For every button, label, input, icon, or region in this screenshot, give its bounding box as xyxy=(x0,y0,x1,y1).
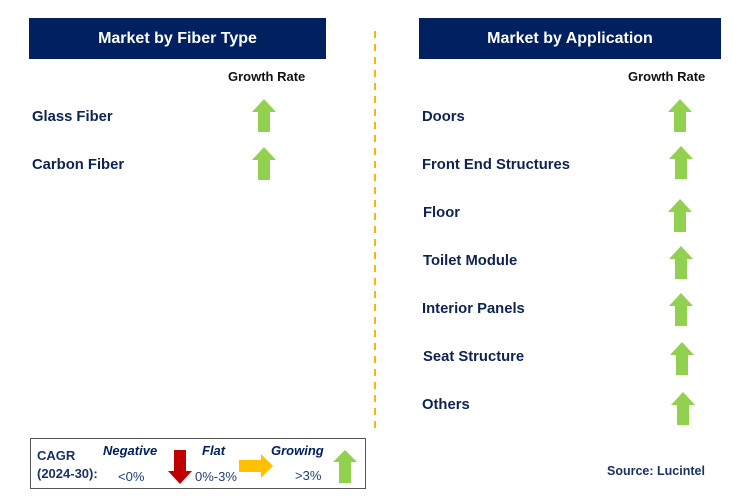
icon: orange right arrow xyxy=(239,454,273,478)
label: Carbon Fiber: Carbon Fiber xyxy=(32,157,124,173)
label: Front End Structures: Front End Structures xyxy=(422,157,570,173)
label: Doors: Doors xyxy=(422,109,465,125)
icon: green up arrow xyxy=(333,450,357,483)
heading: Market by Application xyxy=(419,18,721,59)
legend title: (2024-30): xyxy=(37,466,98,481)
legend: growing label: Growing xyxy=(271,443,324,458)
column label: growth rate left: Growth Rate xyxy=(228,69,305,84)
column label: growth rate right: Growth Rate xyxy=(628,69,705,84)
label: Glass Fiber: Glass Fiber xyxy=(32,109,113,125)
icon: red down arrow xyxy=(168,450,192,484)
heading: Market by Application: Market by Application xyxy=(487,30,653,47)
heading: Market by Fiber Type: Market by Fiber Type xyxy=(98,30,257,47)
label: Interior Panels: Interior Panels xyxy=(422,301,525,317)
label: Others: Others xyxy=(422,397,470,413)
legend: CAGR xyxy=(30,438,366,489)
label: Seat Structure: Seat Structure xyxy=(423,349,524,365)
legend title xyxy=(37,448,98,481)
legend: growing range: >3% xyxy=(295,468,321,483)
label: Floor: Floor xyxy=(423,205,460,221)
legend: negative label: Negative xyxy=(103,443,157,458)
legend title: CAGR xyxy=(37,448,75,463)
legend: flat range: 0%-3% xyxy=(195,469,237,484)
label: Toilet Module: Toilet Module xyxy=(423,253,517,269)
legend: flat label: Flat xyxy=(202,443,225,458)
legend: negative range: <0% xyxy=(118,469,144,484)
heading: Market by Fiber Type xyxy=(29,18,326,59)
source note: Source: Lucintel xyxy=(607,464,705,478)
